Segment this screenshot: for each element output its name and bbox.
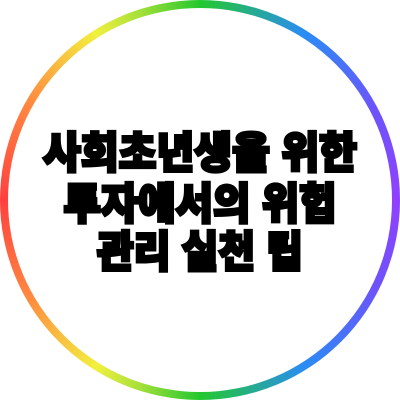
title: 사회초년생을 위한: [43, 130, 357, 178]
title: 투자에서의 위험: [64, 181, 336, 229]
title: 관리 실천 팁: [97, 229, 303, 277]
